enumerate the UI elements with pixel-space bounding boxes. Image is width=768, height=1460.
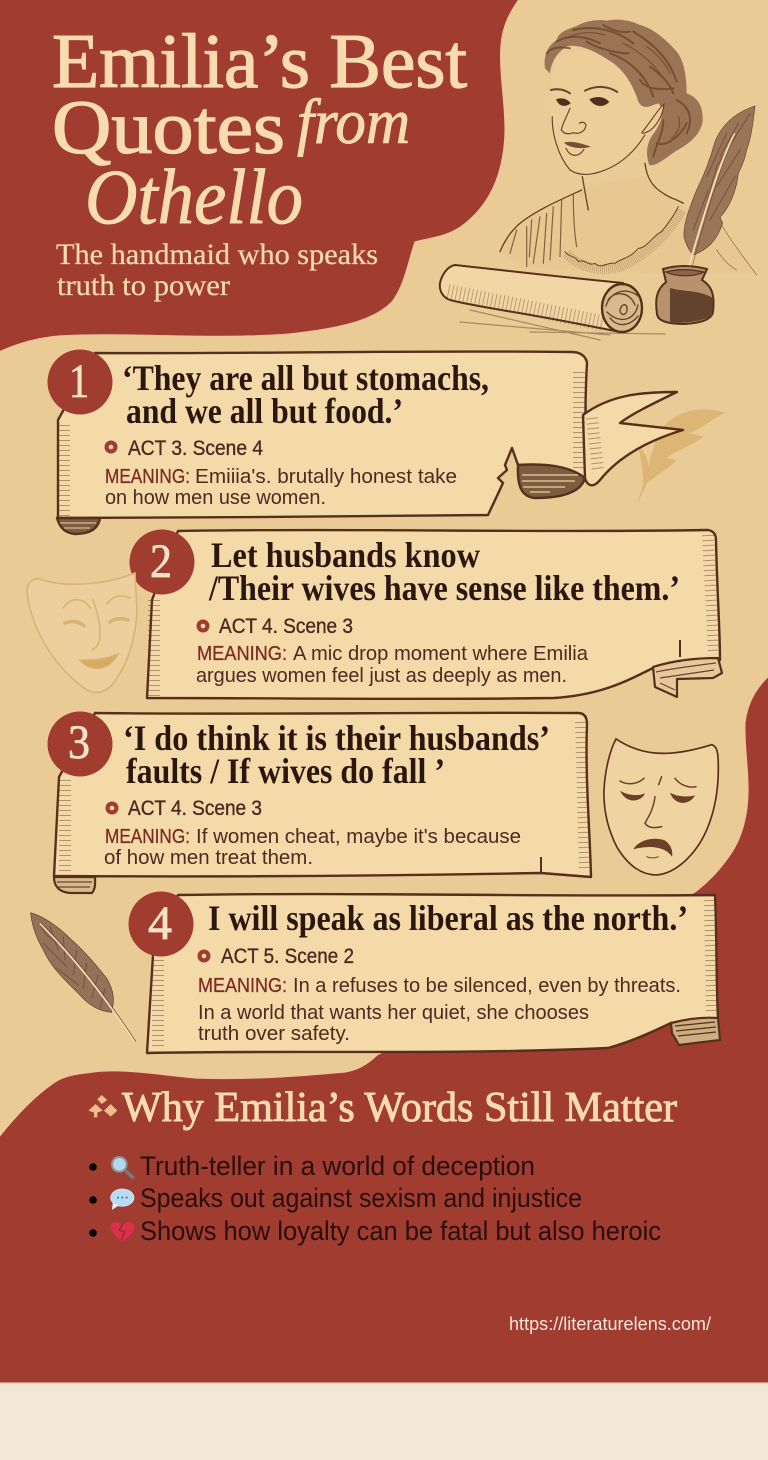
number badge 3 xyxy=(48,712,112,776)
number badge 2: 2 xyxy=(150,535,172,588)
scroll shape 1 xyxy=(57,351,683,534)
meaning text 1: Emiiia's. brutally honest take xyxy=(195,465,457,488)
panel: quote 2 xyxy=(130,530,722,699)
meaning text 2: A mic drop moment where Emilia xyxy=(293,642,589,665)
meaning text 4 xyxy=(198,974,681,1045)
lower red background shape xyxy=(0,672,768,1383)
number badge 1: 1 xyxy=(69,355,89,408)
title: Quotes xyxy=(52,86,285,170)
title: Emilia’s Best xyxy=(52,18,467,104)
number badge 4 xyxy=(128,892,194,956)
number badge 2 xyxy=(130,530,194,594)
quote text 1: ‘They are all but stomachs, xyxy=(122,358,489,398)
title: from xyxy=(297,86,410,157)
meaning text 3 xyxy=(104,825,521,869)
subtitle: The handmaid who speaks xyxy=(56,238,378,271)
subtitle: truth to power xyxy=(57,269,230,302)
faint wheat sprig behind scroll 1 xyxy=(637,409,725,507)
meaning text 1: MEANING: xyxy=(105,465,190,488)
meaning text 2: MEANING: xyxy=(197,642,287,665)
quote text 3: faults / If wives do fall ’ xyxy=(126,751,445,791)
panel: quote 1 xyxy=(48,350,683,534)
quote text 3: ‘I do think it is their husbands’ xyxy=(123,718,550,758)
bottom cream strip xyxy=(0,1383,768,1460)
quote text 2 xyxy=(208,535,680,608)
illustration: rolled scroll and ink pot xyxy=(440,265,714,340)
act label 1: ACT 3. Scene 4 xyxy=(128,437,263,460)
quote text 2: /Their wives have sense like them.’ xyxy=(208,568,680,608)
scroll shape 3 xyxy=(54,713,591,893)
panel: quote 3 xyxy=(48,712,591,893)
meaning text 3: of how men treat them. xyxy=(104,846,313,869)
list item 2: Speaks out against sexism and injustice xyxy=(140,1183,582,1213)
act label 3: ACT 4. Scene 3 xyxy=(128,797,262,820)
meaning text 2 xyxy=(196,642,589,687)
meaning text 4: In a refuses to be silenced, even by threats. xyxy=(293,974,681,997)
list item 1: Truth-teller in a world of deception xyxy=(140,1151,535,1181)
quote text 4: I will speak as liberal as the north.’ xyxy=(208,898,688,938)
illustration: loose feather xyxy=(31,913,136,1042)
act label 2: ACT 4. Scene 3 xyxy=(219,615,353,638)
meaning text 1 xyxy=(105,465,457,509)
icon: sparkles xyxy=(88,1095,117,1117)
illustration: faint comedy mask xyxy=(27,573,137,692)
number badge 4: 4 xyxy=(148,897,172,950)
quote text 2: Let husbands know xyxy=(211,535,480,575)
subtitle xyxy=(56,238,378,302)
panel: quote 4 xyxy=(128,892,720,1053)
number badge 1 xyxy=(48,350,112,414)
meaning text 4: In a world that wants her quiet, she chooses xyxy=(198,1001,589,1024)
bullet list xyxy=(89,1151,661,1246)
act label 4: ACT 5. Scene 2 xyxy=(221,945,354,968)
top red header shape xyxy=(0,0,522,354)
list item 3: Shows how loyalty can be fatal but also heroic xyxy=(140,1216,661,1246)
scroll shape 2 xyxy=(147,530,722,699)
quote text 3 xyxy=(123,718,550,791)
website url: https://literaturelens.com/ xyxy=(509,1314,711,1334)
illustration: portrait of Emilia xyxy=(500,20,757,275)
number badge 3: 3 xyxy=(68,716,90,769)
quote text 1: and we all but food.’ xyxy=(126,391,403,431)
meaning text 3: If women cheat, maybe it's because xyxy=(196,825,521,848)
illustration: quill in inkwell xyxy=(684,106,755,268)
panel: why Emilia's words still matter xyxy=(88,1085,711,1334)
scroll shape 4 xyxy=(147,894,720,1053)
section heading: Why Emilia’s Words Still Matter xyxy=(122,1085,677,1131)
title xyxy=(52,18,467,240)
meaning text 4: MEANING: xyxy=(198,974,287,997)
title: Othello xyxy=(85,153,303,240)
meaning text 2: argues women feel just as deeply as men. xyxy=(196,664,567,687)
quote text 1 xyxy=(122,358,489,431)
meaning text 1: on how men use women. xyxy=(105,486,326,509)
illustration: tragedy mask xyxy=(604,739,718,875)
meaning text 4: truth over safety. xyxy=(198,1022,350,1045)
meaning text 3: MEANING: xyxy=(105,825,190,848)
